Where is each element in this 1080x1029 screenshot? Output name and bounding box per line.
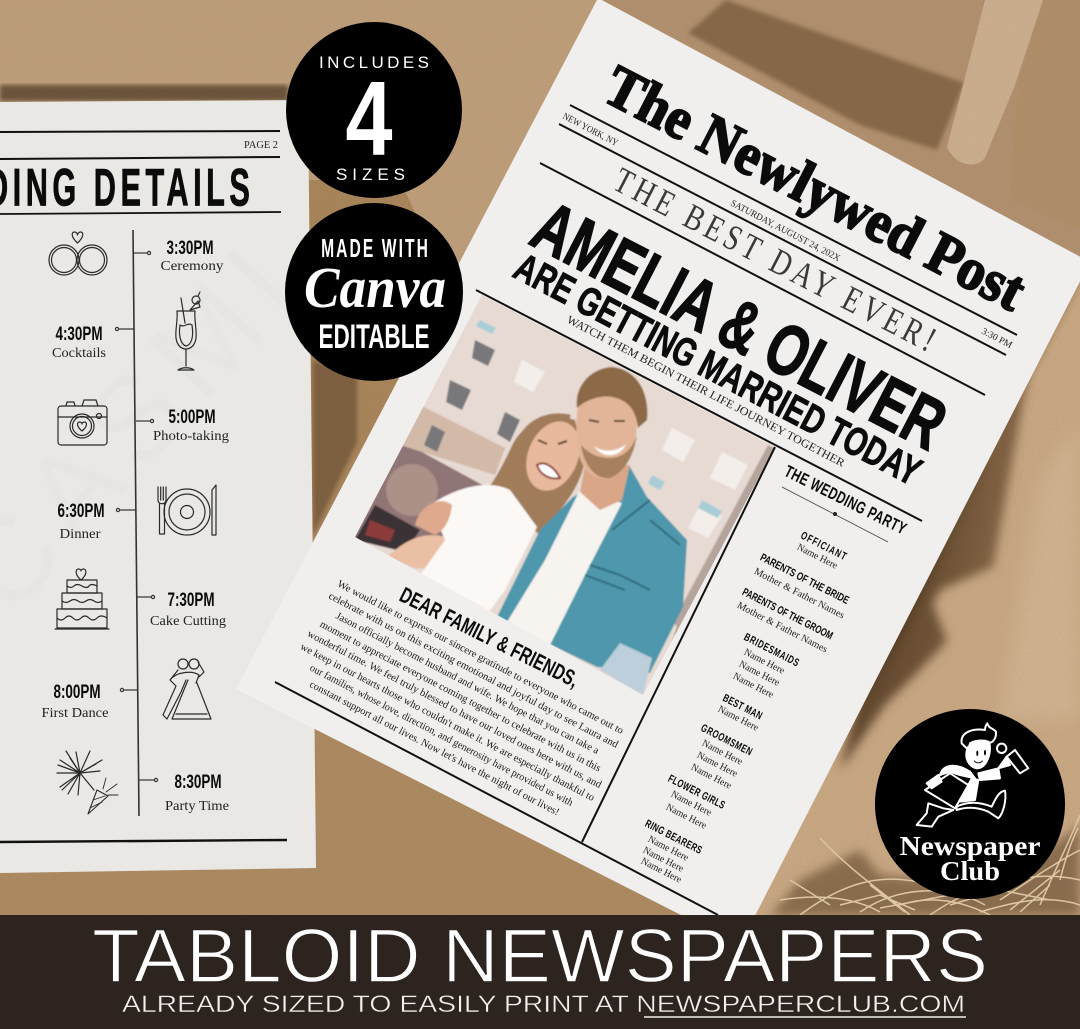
badge: includes 4 sizes xyxy=(286,22,462,198)
woman's hair xyxy=(490,418,584,534)
newspaper front page xyxy=(236,0,1080,945)
banner title: TABLOID NEWSPAPERS xyxy=(92,914,988,999)
guest names: Name Here xyxy=(646,834,691,864)
tagline: THE BEST DAY EVER! xyxy=(607,159,943,359)
mascot: running newspaper boy xyxy=(917,723,1028,827)
icon: dancing couple xyxy=(163,659,211,719)
role names: BRIDESMAIDS xyxy=(742,631,801,670)
man's jacket xyxy=(497,467,687,673)
woman xyxy=(386,413,590,615)
paper sheet xyxy=(236,0,1080,945)
icon: fireworks and party popper xyxy=(57,751,118,814)
guest names: Name Here xyxy=(795,542,840,572)
left page paper xyxy=(0,100,316,873)
pampas grass xyxy=(780,815,1080,915)
schedule labels: 4:30PM xyxy=(56,324,102,345)
man's hair xyxy=(577,367,647,428)
letter body text: constant support all our lives. Now let's have the night of our lives! xyxy=(307,679,561,818)
guest names: Name Here xyxy=(639,856,684,886)
schedule labels: Cocktails xyxy=(52,346,106,361)
letter body text: We would like to express our sincere gratitude to everyone who came out to xyxy=(335,579,625,737)
column divider rule xyxy=(582,447,775,842)
badge: made with canva editable: MADE WITH xyxy=(321,234,428,263)
letter body text: moment to appreciate everyone coming together to celebrate with us in this xyxy=(318,619,602,774)
banner subtitle: ALREADY SIZED TO EASILY PRINT AT NEWSPAPERCLUB.COM xyxy=(122,991,965,1018)
timeline axis and ticks xyxy=(115,230,158,816)
subheading: WATCH THEM BEGIN THEIR LIFE JOURNEY TOGETHER xyxy=(565,314,847,470)
guest names: Name Here xyxy=(689,762,734,792)
letter body text: Jason officially become husband and wife. We hope that you can take a xyxy=(334,611,601,757)
left page rules xyxy=(0,131,287,842)
icon: cocktail xyxy=(176,292,200,370)
role names xyxy=(643,529,851,857)
guest names: Name Here xyxy=(641,845,686,875)
schedule labels xyxy=(42,238,229,814)
schedule labels: 8:30PM xyxy=(174,772,222,793)
schedule labels: 6:30PM xyxy=(58,501,104,522)
bottom rule xyxy=(275,682,718,915)
guest names: Name Here xyxy=(716,704,761,734)
schedule labels: 8:00PM xyxy=(54,682,100,703)
heading underline with ornament xyxy=(782,487,888,542)
hand on shoulder xyxy=(415,501,452,535)
schedule labels: Photo-taking xyxy=(153,429,229,444)
letter body text: our families, whose love, direction, and generosity have provided us with xyxy=(308,663,575,809)
man xyxy=(497,367,687,695)
logo wordmark: Club xyxy=(940,856,1000,886)
man's shirt xyxy=(507,490,622,645)
date: SATURDAY, AUGUST 24, 202X xyxy=(729,199,842,264)
schedule labels: Cake Cutting xyxy=(150,614,226,629)
schedule labels: Party Time xyxy=(165,799,229,814)
letter body text: celebrate with us on this exciting emotional and joyful day to see Laura and xyxy=(326,591,621,751)
badge: made with canva editable: Canva xyxy=(304,255,446,320)
badge: includes 4 sizes: SIZES xyxy=(336,165,405,184)
masthead rules xyxy=(476,105,1017,521)
photo of the couple xyxy=(355,295,774,695)
icon: camera xyxy=(58,400,107,445)
schedule labels: Dinner xyxy=(60,527,101,542)
role names: FLOWER GIRLS xyxy=(666,773,727,812)
logo wordmark xyxy=(900,831,1041,886)
badge: includes 4 sizes: INCLUDES xyxy=(319,53,429,72)
man's face xyxy=(576,392,640,479)
schedule labels: Ceremony xyxy=(160,259,224,274)
link underline xyxy=(644,1016,966,1018)
column heading: THE WEDDING PARTY xyxy=(781,463,909,539)
headline subline: ARE GETTING MARRIED TODAY xyxy=(507,245,929,495)
role names: GROOMSMEN xyxy=(698,722,754,759)
badge: newspaper club logo xyxy=(875,709,1065,899)
man's neck xyxy=(580,465,630,510)
guest names: Name Here xyxy=(737,659,782,689)
guest names: Mother & Father Names xyxy=(735,600,829,655)
schedule labels: 3:30PM xyxy=(166,238,214,259)
location: NEW YORK, NY xyxy=(561,112,619,149)
footer banner xyxy=(0,914,1080,1029)
letter body text xyxy=(298,579,625,818)
logo wordmark: Newspaper xyxy=(900,831,1041,861)
icon: plate and cutlery xyxy=(158,485,216,535)
guest names: Name Here xyxy=(669,789,714,819)
role names: BEST MAN xyxy=(720,692,764,723)
woman's arm and hand xyxy=(388,534,446,569)
guest names: Name Here xyxy=(700,738,745,768)
role names: RING BEARERS xyxy=(643,818,704,857)
guest names: Mother & Father Names xyxy=(752,566,846,621)
guest names: Name Here xyxy=(731,671,776,701)
icon: rings xyxy=(49,232,107,275)
role names: PARENTS OF THE BRIDE xyxy=(758,552,851,607)
role names: OFFICIANT xyxy=(798,529,848,563)
guest names xyxy=(639,542,846,886)
schedule labels: First Dance xyxy=(42,706,108,721)
page number: PAGE 2 xyxy=(244,140,278,151)
jacket cuff xyxy=(600,643,652,695)
guest names: Name Here xyxy=(695,750,740,780)
letter body text: wonderful time. We feel truly blessed to have our loved ones here with us, and xyxy=(305,629,604,791)
masthead title: The Newlywed Post xyxy=(594,52,1037,324)
icon: wedding cake xyxy=(55,569,109,629)
badge: made with canva editable: EDITABLE xyxy=(318,318,430,356)
left page: wedding details timeline xyxy=(0,100,330,873)
letter heading: DEAR FAMILY & FRIENDS, xyxy=(395,583,582,693)
role names: PARENTS OF THE GROOM xyxy=(740,586,835,642)
time: 3:30 PM xyxy=(980,327,1014,351)
woman's face xyxy=(525,420,580,492)
schedule labels: 5:00PM xyxy=(168,407,216,428)
guest names: Name Here xyxy=(664,802,709,832)
jacket seams xyxy=(585,500,680,590)
schedule labels: 7:30PM xyxy=(168,590,214,611)
woman's shirt xyxy=(420,485,537,615)
guest names: Name Here xyxy=(742,647,787,677)
badge: made with canva editable xyxy=(285,203,463,381)
badge: includes 4 sizes: 4 xyxy=(346,60,393,178)
letter body text: we keep in our hearts those who couldn't make it. We are especially thankful to xyxy=(298,642,596,804)
wedding party column xyxy=(639,463,909,886)
